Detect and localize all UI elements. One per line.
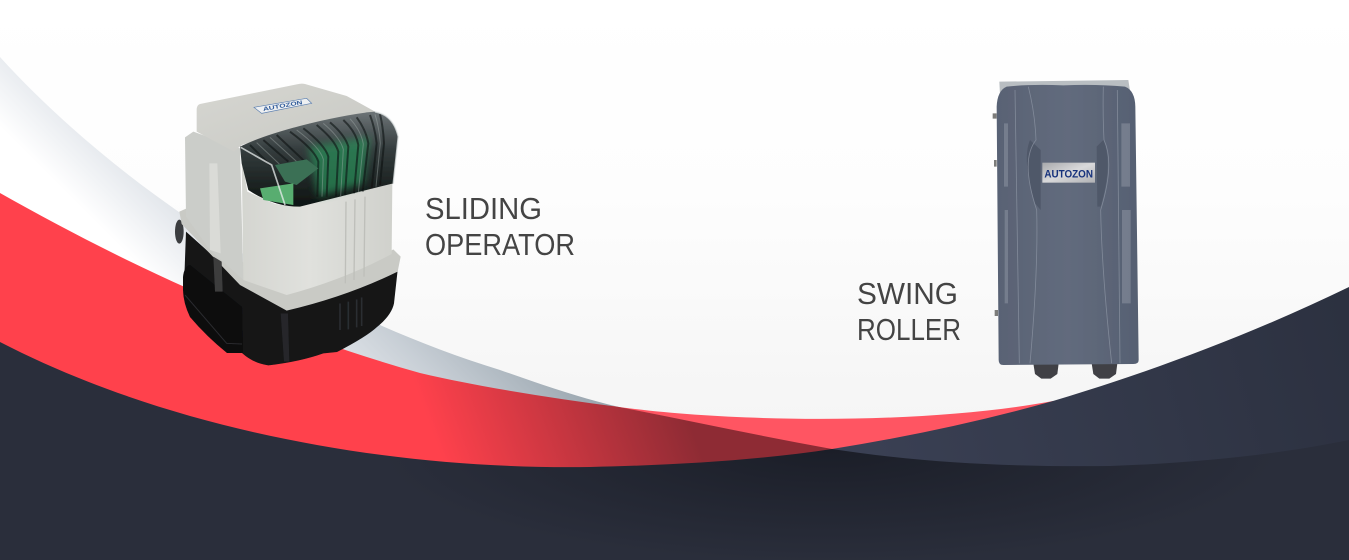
foot: [183, 265, 243, 353]
swoosh: grey fade wedge: [0, 57, 619, 430]
brand plate: AUTOZON: [1044, 169, 1093, 181]
top face: [197, 84, 375, 152]
front ribs: [345, 197, 365, 283]
black base: [184, 232, 398, 365]
label: swing roller: SWING: [857, 276, 958, 311]
label: sliding operator: OPERATOR: [425, 227, 575, 262]
cable gland: [175, 220, 184, 244]
hinges: [993, 113, 998, 316]
foot edge: [185, 295, 242, 344]
glass edge: [241, 112, 398, 205]
side pillar: [209, 163, 221, 253]
brand label: AUTOZON: [263, 100, 303, 113]
grey case: [997, 85, 1139, 365]
swoosh: dark floor: [0, 342, 1349, 560]
side highlights: [1004, 123, 1131, 303]
brand plate: [1042, 163, 1095, 183]
label: swing roller: ROLLER: [857, 312, 961, 347]
dark post: [213, 257, 223, 292]
base ribs: [340, 297, 362, 330]
product: swing roller: [993, 80, 1139, 379]
swoosh: red band with dark shading: [0, 193, 832, 470]
label: sliding operator: SLIDING: [425, 191, 542, 226]
left face: [185, 132, 243, 280]
swoosh: right navy band: [832, 287, 1349, 470]
circuit board: [275, 159, 318, 185]
metal top strip: [999, 80, 1131, 95]
base highlight: [281, 313, 289, 362]
product: sliding operator: [175, 84, 401, 365]
lower board: [260, 183, 293, 205]
louvre highlights: [257, 114, 380, 197]
green glow: [308, 137, 370, 197]
front face: [242, 157, 392, 295]
brand label: [254, 98, 312, 113]
window: [240, 112, 398, 207]
louvre ribs: [250, 114, 384, 197]
grey collar: [179, 208, 401, 311]
feet: [1033, 363, 1117, 379]
swoosh: light red centre: [612, 401, 1053, 470]
side recesses: [1027, 140, 1108, 210]
moulding lines: [1015, 87, 1120, 363]
